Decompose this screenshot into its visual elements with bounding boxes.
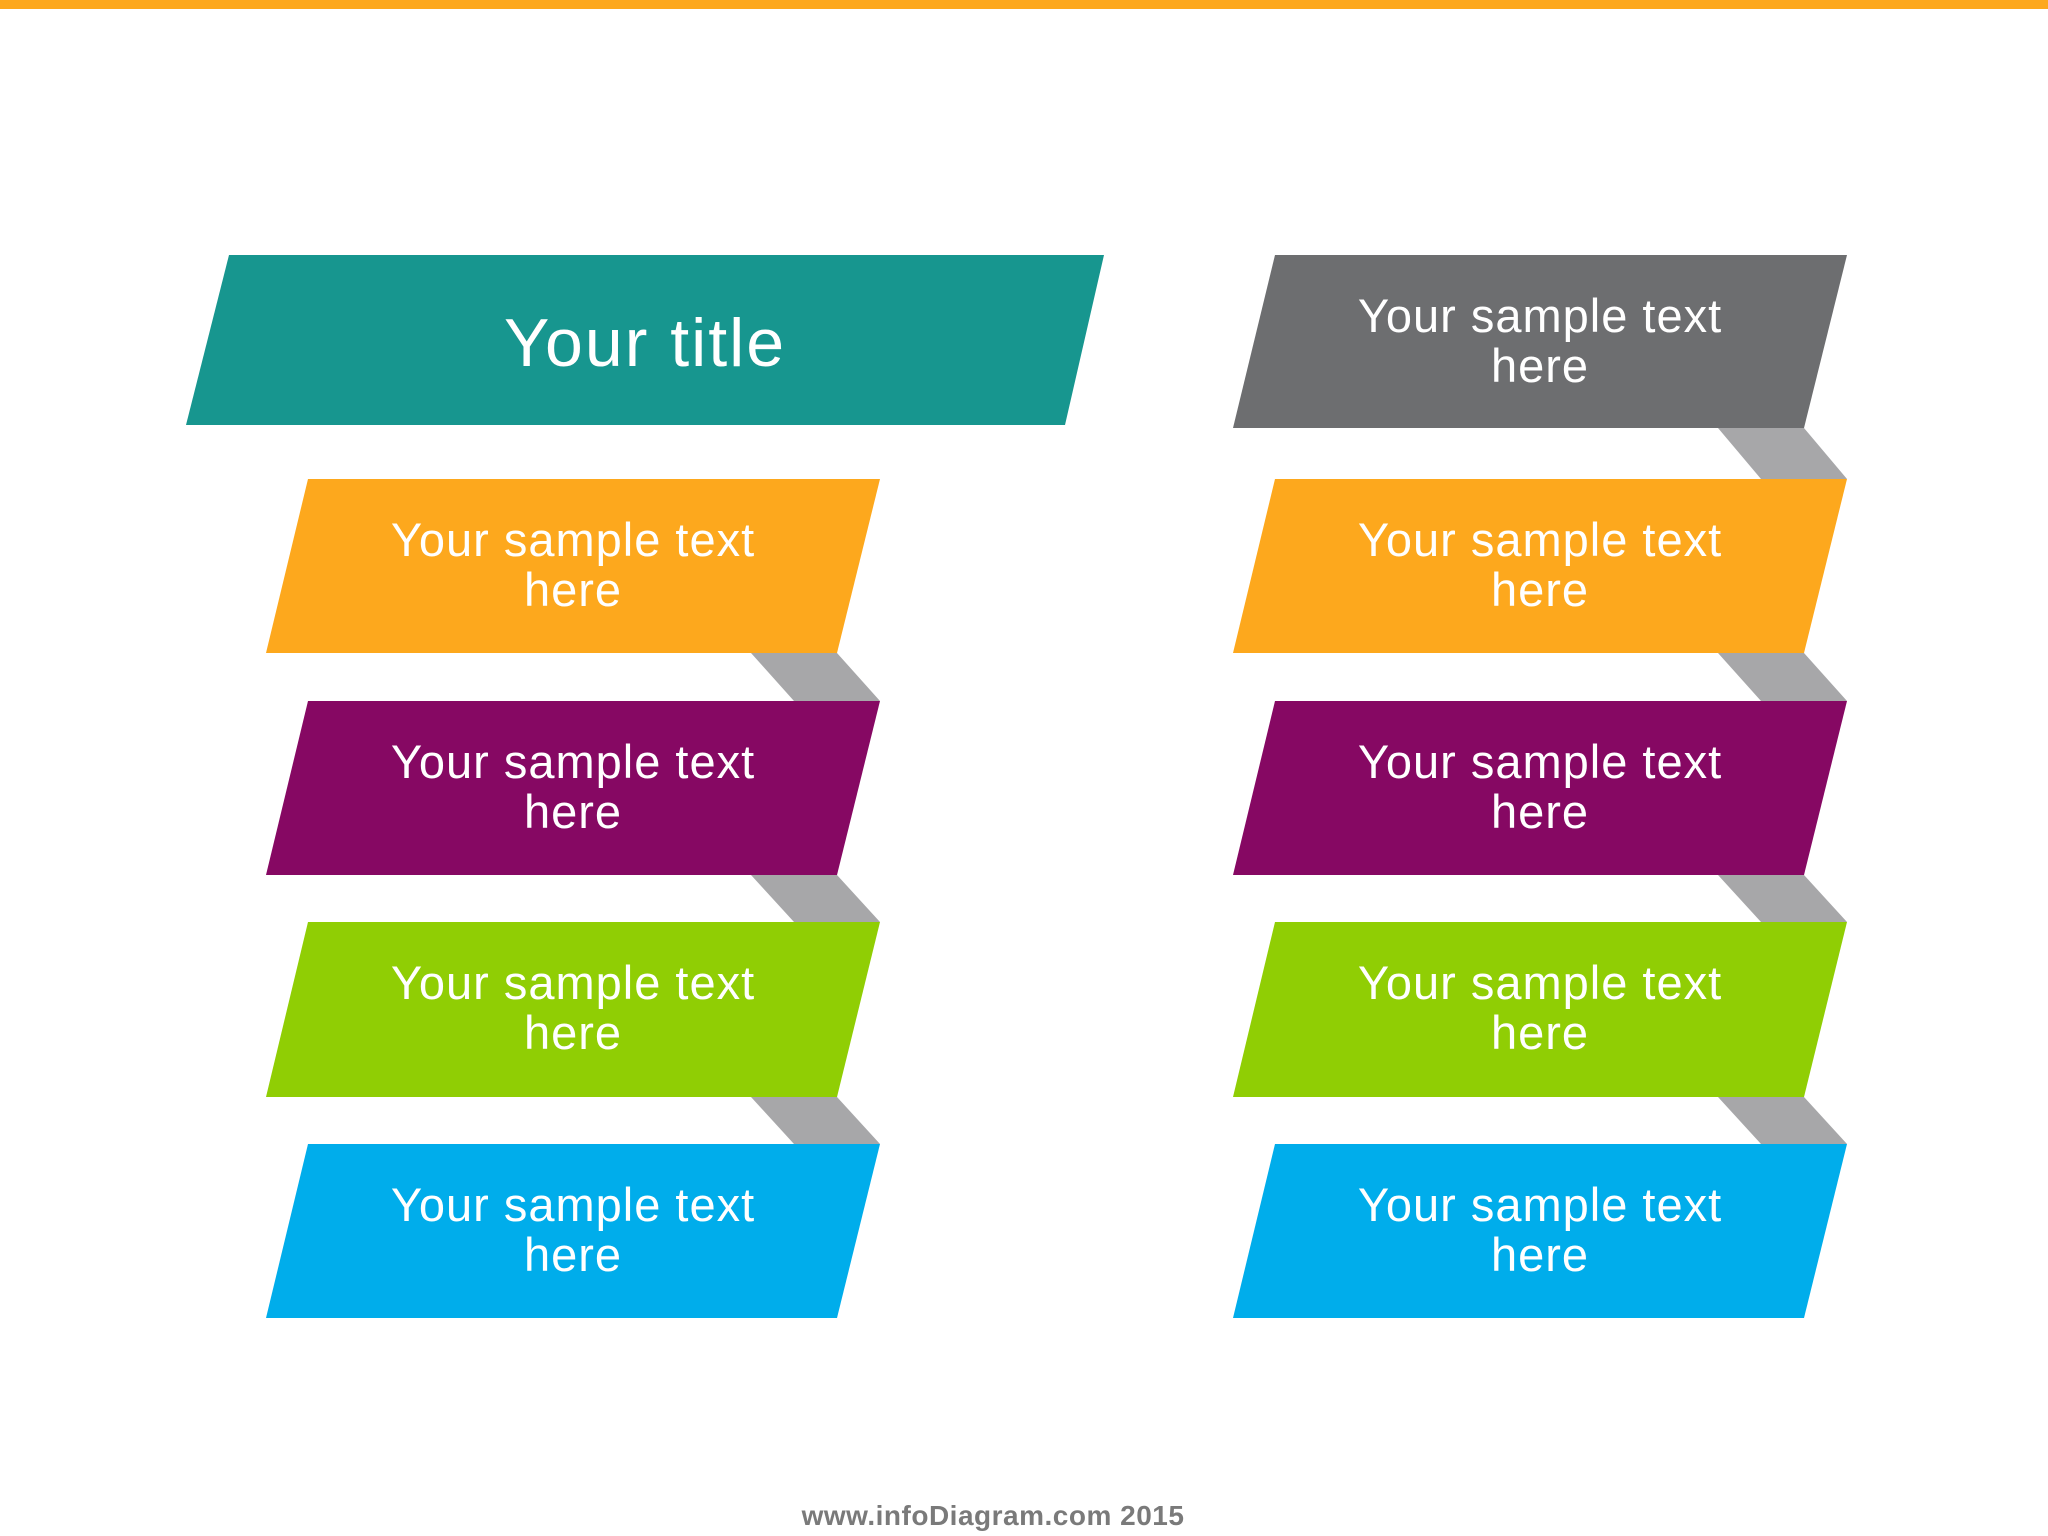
right item 1 orange: here: [1491, 563, 1589, 616]
right item 4 blue: [1233, 1144, 1847, 1318]
right item 0 gray: Your sample text: [1358, 289, 1722, 342]
right item 4 blue: Your sample text: [1358, 1178, 1722, 1231]
left item 4 blue: here: [524, 1228, 622, 1281]
right item 1 orange: Your sample text: [1358, 513, 1722, 566]
left item 1 orange: [266, 479, 880, 653]
top orange bar: [0, 0, 2048, 9]
right item 3 green: here: [1491, 1006, 1589, 1059]
connector 2: [751, 875, 880, 922]
left item 1 orange: here: [524, 563, 622, 616]
right item 1 orange: [1233, 479, 1847, 653]
left item 2 purple: [266, 701, 880, 875]
left item 4 blue: [266, 1144, 880, 1318]
left item 1 orange: Your sample text: [391, 513, 755, 566]
connector r0: [1718, 428, 1847, 479]
left item 3 green: [266, 922, 880, 1097]
connector 1: [751, 653, 880, 701]
right item 2 purple: Your sample text: [1358, 735, 1722, 788]
title banner: Your title: [504, 305, 786, 381]
left item 3 green: Your sample text: [391, 956, 755, 1009]
right item 3 green: [1233, 922, 1847, 1097]
right item 0 gray: [1233, 255, 1847, 428]
footer: www.infoDiagram.com 2015: [801, 1500, 1184, 1531]
right item 3 green: Your sample text: [1358, 956, 1722, 1009]
connector r3: [1718, 1097, 1847, 1144]
right column: [1233, 255, 1847, 1318]
left item 2 purple: here: [524, 785, 622, 838]
left item 2 purple: Your sample text: [391, 735, 755, 788]
right item 2 purple: here: [1491, 785, 1589, 838]
right item 4 blue: here: [1491, 1228, 1589, 1281]
right item 2 purple: [1233, 701, 1847, 875]
left item 4 blue: Your sample text: [391, 1178, 755, 1231]
connector r2: [1718, 875, 1847, 922]
title banner: [186, 255, 1104, 425]
left column: [266, 479, 880, 1318]
right item 0 gray: here: [1491, 339, 1589, 392]
left item 3 green: here: [524, 1006, 622, 1059]
connector r1: [1718, 653, 1847, 701]
connector 3: [751, 1097, 880, 1144]
